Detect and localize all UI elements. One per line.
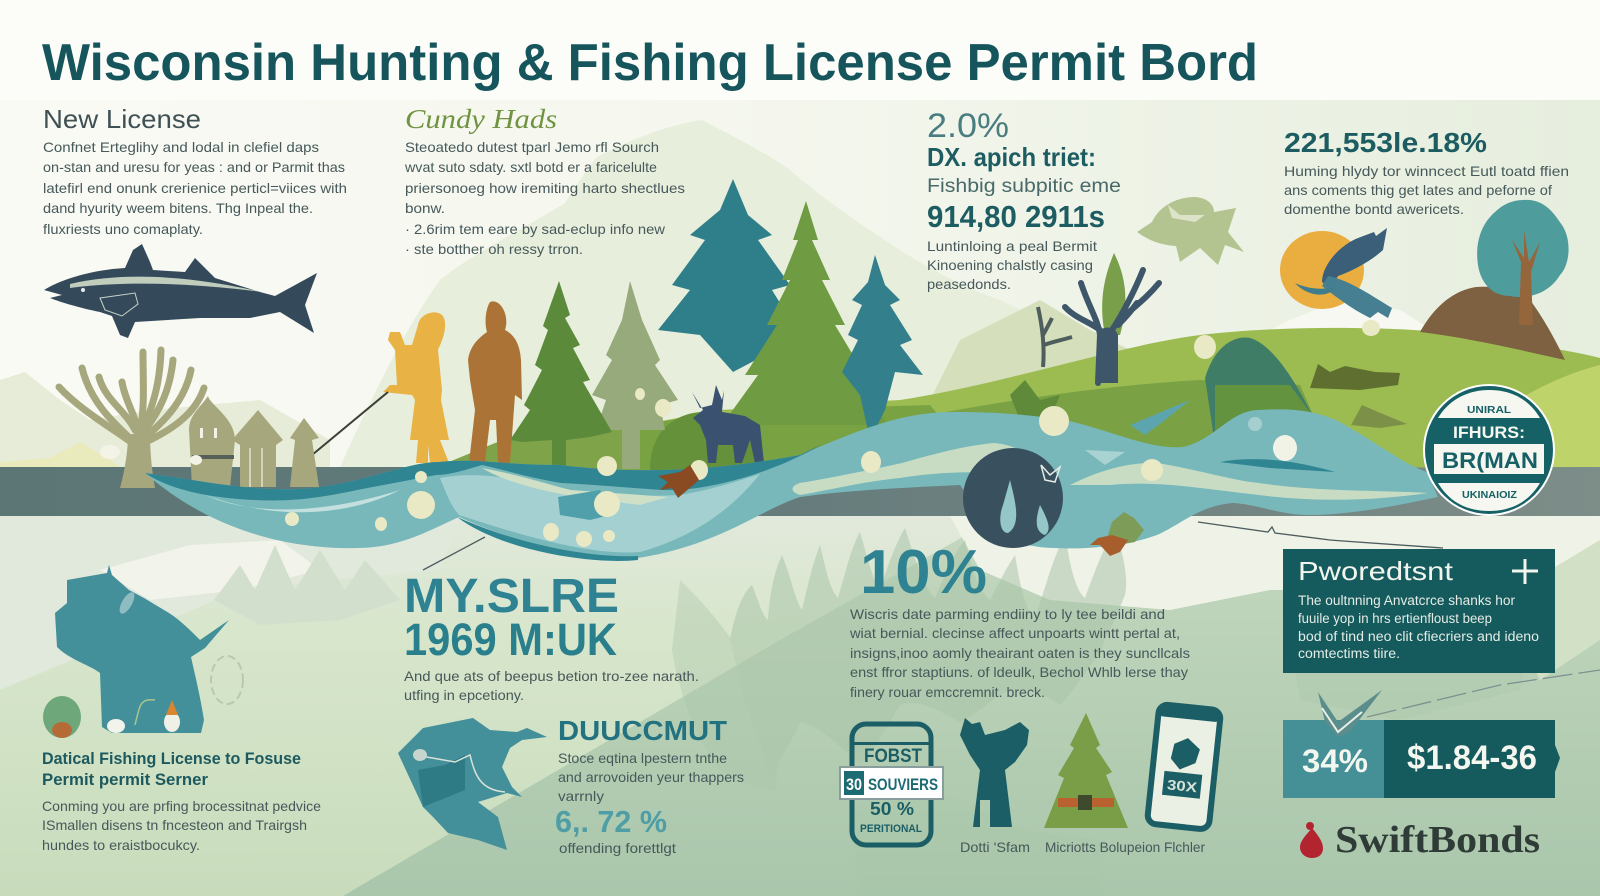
text block: Cundy Hads: priersonoeg how iremiting harto shectlues — [405, 180, 685, 196]
icon: permit badge: 30 — [846, 775, 862, 794]
price bar: $1.84-36 — [1407, 739, 1537, 777]
icon: deer — [692, 385, 764, 463]
stat block: DUUCCMUT: 6,. 72 % — [555, 804, 667, 839]
text block: fishing license: Permit permit Serner — [42, 770, 208, 789]
badge: permit seal — [1423, 384, 1555, 516]
stat block: 10%: 10% — [860, 538, 987, 607]
figure: brown person — [468, 301, 522, 463]
stat block: hunting figures: Huming hlydy tor winncect Eutl toatd ffien — [1284, 163, 1569, 179]
panel: Pworedtsnt: Pworedtsnt — [1298, 556, 1454, 586]
tree: small teal conifer — [842, 255, 923, 440]
background: pale foliage silhouettes — [672, 528, 1540, 896]
text block: New License: Confnet Erteglihy and lodal in clefiel daps — [43, 139, 319, 155]
icon: olive fish silhouette — [1137, 197, 1244, 265]
icon: brown hill with teal tree — [1420, 200, 1569, 360]
icon: sun and bird — [1280, 228, 1392, 318]
map: regional shape — [398, 718, 547, 850]
stat block: MY.SLRE — [404, 570, 699, 703]
icon: dark circle with water drops — [963, 448, 1063, 548]
text block: New License: New License — [43, 104, 201, 134]
stat block: hunting figures: domenthe bontd awericets. — [1284, 201, 1464, 217]
tree: green pine — [510, 281, 612, 466]
stat block: hunting figures: ans coments thig get lates and peforne of — [1284, 182, 1552, 198]
icon: bare trees — [1038, 253, 1159, 383]
text block: Cundy Hads: · ste botther oh ressy trron. — [405, 241, 583, 257]
icon: green tree with belt — [1044, 713, 1128, 828]
icon: permit badge: FOBST — [864, 746, 922, 767]
stat block: DUUCCMUT: offending forettlgt — [559, 840, 676, 856]
map: Wisconsin — [55, 565, 243, 733]
text block: Cundy Hads: Steoatedo dutest tparl Jemo rfl Sourch — [405, 139, 659, 155]
badge: permit seal: IFHURS: — [1453, 423, 1525, 442]
icon captions — [960, 839, 1205, 855]
stat block: DUUCCMUT: varrnly — [558, 788, 604, 804]
text block: New License: on-stan and uresu for yeas : and or Parmit thas — [43, 159, 345, 175]
text block: New License: fluxriests uno comaplaty. — [43, 221, 203, 237]
panel: Pworedtsnt: The oultnning Anvatcrce shanks hor — [1298, 593, 1515, 608]
price bar — [1283, 690, 1560, 798]
stat block: DUUCCMUT: and arrovoiden yeur thappers — [558, 769, 744, 785]
icon: phone: 30X — [1166, 776, 1199, 795]
title: Wisconsin Hunting & Fishing License Permit Bord — [42, 34, 1258, 92]
text block: fishing license: Datical Fishing License to Fosuse — [42, 749, 301, 768]
badge: permit seal: UNIRAL — [1467, 405, 1511, 416]
icon: dark fish — [44, 244, 317, 338]
green hills — [449, 328, 1600, 470]
badge: permit seal: BR(MAN — [1442, 448, 1538, 473]
stat block: DUUCCMUT: DUUCCMUT — [558, 715, 727, 746]
icon: maple leaf — [658, 465, 699, 498]
stat block: 10%: wiat bernial. clecinse affect unpoarts wintt pertal at, — [849, 625, 1180, 641]
stat block: fishing figures — [927, 107, 1121, 292]
stat block: fishing figures: Luntinloing a peal Bermit — [927, 238, 1097, 254]
stat block: hunting figures — [1284, 127, 1569, 217]
stat block: 10%: finery rouar emccremnit. breck. — [850, 684, 1045, 700]
stat block: MY.SLRE: And que ats of beepus betion tro-zee narath. — [404, 668, 699, 684]
text block: fishing license: ISmallen disens tn fncesteon and Trairgsh — [42, 817, 307, 833]
stat block: fishing figures: 914,80 2911s — [927, 199, 1105, 234]
icon captions: Micriotts Bolupeion Flchler — [1045, 839, 1205, 855]
stat block: fishing figures: 2.0% — [927, 107, 1009, 145]
price bar: 34% — [1302, 743, 1368, 779]
panel: Pworedtsnt: fuuile yop in hrs ertienfloust beep — [1298, 611, 1492, 626]
icon: acorn and leaves — [1090, 512, 1144, 556]
text block: Cundy Hads: wvat suto sdaty. sxtl botd er a faricelulte — [404, 159, 657, 175]
stat block: 10% — [849, 538, 1190, 700]
text block: Cundy Hads: Cundy Hads — [405, 104, 557, 134]
stat block: DUUCCMUT: Stoce eqtina lpestern tnthe — [558, 750, 727, 766]
icon: permit badge: SOUVIERS — [868, 775, 938, 794]
icon: phone — [1147, 704, 1221, 830]
bubbles on river — [100, 320, 1380, 547]
stat block: fishing figures: DX. apich triet: — [927, 142, 1096, 172]
text block: Cundy Hads: · 2.6rim tem eare by sad-eclup info new — [405, 221, 666, 237]
text block: New License: latefirl end onunk crerienice perticl=viices with — [43, 180, 347, 196]
icon: permit badge — [840, 724, 943, 845]
panel: Pworedtsnt: comtectims tiire. — [1298, 646, 1400, 661]
text block: fishing license: hundes to eraistbocukcy. — [42, 837, 200, 853]
icon: check mark — [1318, 690, 1382, 737]
stat block: MY.SLRE: MY.SLRE — [404, 570, 619, 623]
icon captions: Dotti 'Sfam — [960, 839, 1030, 855]
badge: permit seal: UKINAIOIZ — [1462, 490, 1517, 501]
stat block: fishing figures: Kinoening chalstly casing — [927, 257, 1093, 273]
tree: teal conifer — [658, 179, 806, 372]
stat block: MY.SLRE: 1969 M:UK — [404, 614, 617, 665]
panel: Pworedtsnt: bod of tind neo clit cfiecriers and ideno — [1298, 629, 1539, 644]
stat block: 10%: enst ffror staptiuns. of ldeulk, Bechol Whlb lerse thay — [850, 664, 1188, 680]
text block: fishing license: Conming you are prfing brocessitnat pedvice — [42, 798, 321, 814]
stat block: hunting figures: 221,553le.18% — [1284, 127, 1487, 158]
logo: SwiftBonds: SwiftBonds — [1335, 819, 1540, 861]
tree: sage conifer — [592, 281, 678, 469]
icon: permit badge: PERITIONAL — [860, 823, 922, 835]
text block: Cundy Hads — [404, 104, 685, 257]
icon: permit badge: 50 % — [870, 799, 914, 819]
fishing lines — [423, 522, 1600, 717]
text block: Cundy Hads: bonw. — [405, 200, 445, 216]
text block: New License — [43, 104, 347, 237]
grey band behind river — [0, 467, 1600, 516]
stat block: fishing figures: Fishbig subpitic eme — [927, 176, 1121, 197]
stat block: DUUCCMUT — [555, 715, 744, 856]
text block: fishing license — [42, 749, 321, 853]
icon: tan tree and village — [59, 350, 319, 488]
icon: animal silhouette — [960, 718, 1029, 827]
icon: green egg leaf — [43, 696, 81, 738]
tree: tall green conifer — [722, 201, 888, 425]
river — [145, 400, 1438, 561]
conifer trees — [510, 179, 923, 469]
stat block: 10%: insigns,inoo aomly theairant oaten is they suncllcals — [850, 645, 1190, 661]
stat block: fishing figures: peasedonds. — [927, 276, 1011, 292]
text block: New License: dand hyurity weem bitens. Thg Inpeal the. — [43, 200, 313, 216]
stat block: 10%: Wiscris date parming endiiny to ly tee beildi and — [850, 606, 1165, 622]
stat block: MY.SLRE: utfing in epcetiony. — [404, 687, 524, 703]
panel: Pworedtsnt — [1283, 549, 1555, 673]
figure: yellow person with fishing rod — [312, 312, 449, 463]
